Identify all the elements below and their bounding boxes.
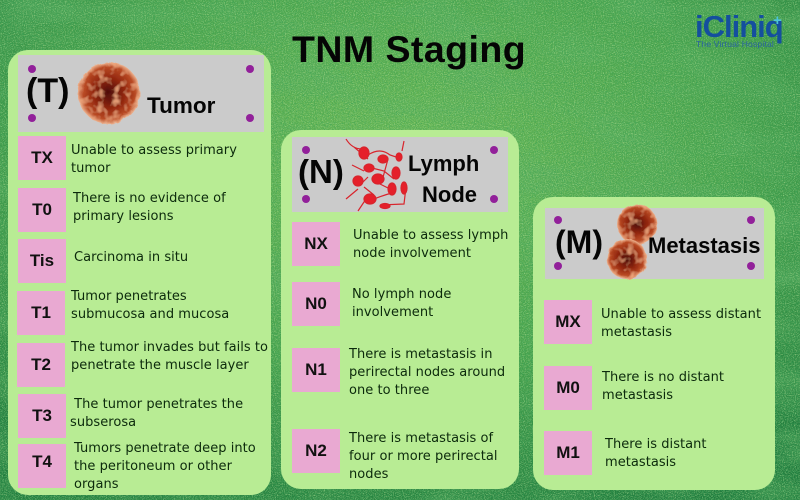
- panel: metastasis: [533, 197, 775, 490]
- row: T2: [17, 343, 65, 387]
- row: M1: [544, 431, 592, 475]
- text: T4: organs: [74, 477, 119, 492]
- row: M1: M1: [556, 443, 580, 462]
- text: Tis: Carcinoma in situ: [74, 250, 188, 265]
- text: N1: one to three: [349, 383, 429, 398]
- row: MX: [544, 300, 592, 344]
- row: NX: NX: [304, 234, 328, 253]
- text: TX: Unable to assess primary: [71, 143, 237, 158]
- logo: iCliniq: +: [773, 12, 782, 29]
- text: T2: [70, 340, 268, 373]
- text: NX: [353, 228, 508, 261]
- panel: lymph node: [281, 130, 519, 489]
- row: Tis: Tis: [30, 251, 54, 270]
- text: N0: No lymph node: [352, 287, 451, 302]
- text: T0: There is no evidence of: [73, 191, 226, 206]
- text: T4: [74, 441, 256, 492]
- text: N0: involvement: [352, 305, 433, 320]
- text: NX: node involvement: [353, 246, 471, 261]
- text: T2: The tumor invades but fails to: [71, 340, 268, 355]
- text: MX: Unable to assess distant: [601, 307, 761, 322]
- text: M0: metastasis: [602, 388, 673, 403]
- logo: iCliniq: iCliniq: [695, 9, 783, 44]
- row: N0: N0: [305, 294, 327, 313]
- row: T1: [17, 291, 65, 335]
- header: metastasis: [545, 208, 764, 279]
- row: TX: [18, 136, 66, 180]
- text: N1: [348, 347, 505, 398]
- row: TX: TX: [31, 148, 53, 167]
- row: N2: [292, 429, 340, 473]
- row: T0: [18, 188, 66, 232]
- row: T4: [18, 444, 66, 488]
- row: NX: [292, 222, 340, 266]
- text: T3: subserosa: [70, 415, 136, 430]
- text: N1: perirectal nodes around: [349, 365, 505, 380]
- text: TX: [71, 143, 237, 176]
- row: N1: [292, 348, 340, 392]
- text: T3: [70, 397, 243, 430]
- text: MX: [601, 307, 761, 340]
- row: N0: [292, 282, 340, 326]
- text: N2: four or more perirectal: [349, 449, 498, 464]
- row: MX: MX: [555, 312, 581, 331]
- row: M0: M0: [556, 378, 580, 397]
- text: T3: The tumor penetrates the: [74, 397, 243, 412]
- header: tumor: (T): [26, 72, 69, 110]
- logo: iCliniq: The Virtual Hospital: [696, 39, 774, 49]
- text: T1: submucosa and mucosa: [71, 307, 229, 322]
- text: N0: [352, 287, 451, 320]
- row: T0: T0: [32, 200, 52, 219]
- text: MX: metastasis: [601, 325, 672, 340]
- text: M1: [604, 437, 707, 470]
- header: tumor: Tumor: [147, 93, 215, 118]
- header: lymph node: Lymph: [408, 151, 479, 176]
- row: T4: T4: [32, 452, 52, 471]
- text: TX: tumor: [71, 161, 110, 176]
- row: T1: T1: [31, 303, 51, 322]
- title: TNM Staging: [292, 28, 526, 70]
- text: T0: [72, 191, 226, 224]
- text: NX: Unable to assess lymph: [353, 228, 508, 243]
- header: metastasis: Metastasis: [648, 233, 761, 258]
- header: lymph node: (N): [298, 153, 344, 190]
- text: N2: nodes: [349, 467, 388, 482]
- header: lymph node: Node: [422, 182, 477, 207]
- header: metastasis: (M): [555, 224, 603, 260]
- text: M0: There is no distant: [602, 370, 724, 385]
- panel: tumor: [8, 50, 271, 495]
- row: T3: T3: [32, 406, 52, 425]
- text: M0: [602, 370, 724, 403]
- header: tumor: [18, 55, 264, 132]
- text: T1: Tumor penetrates: [71, 289, 187, 304]
- row: Tis: [18, 239, 66, 283]
- text: T4: the peritoneum or other: [74, 459, 232, 474]
- text: N1: There is metastasis in: [349, 347, 492, 362]
- text: N2: There is metastasis of: [349, 431, 493, 446]
- text: T0: primary lesions: [73, 209, 174, 224]
- row: M0: [544, 366, 592, 410]
- row: T2: T2: [31, 355, 51, 374]
- text: T1: [70, 289, 229, 322]
- text: T2: penetrate the muscle layer: [71, 358, 249, 373]
- row: N1: N1: [305, 360, 327, 379]
- text: M1: There is distant: [605, 437, 707, 452]
- row: T3: [18, 394, 66, 438]
- text: T4: Tumors penetrate deep into: [74, 441, 256, 456]
- header: lymph node: [292, 137, 508, 212]
- text: M1: metastasis: [605, 455, 676, 470]
- text: N2: [348, 431, 498, 482]
- row: N2: N2: [305, 441, 327, 460]
